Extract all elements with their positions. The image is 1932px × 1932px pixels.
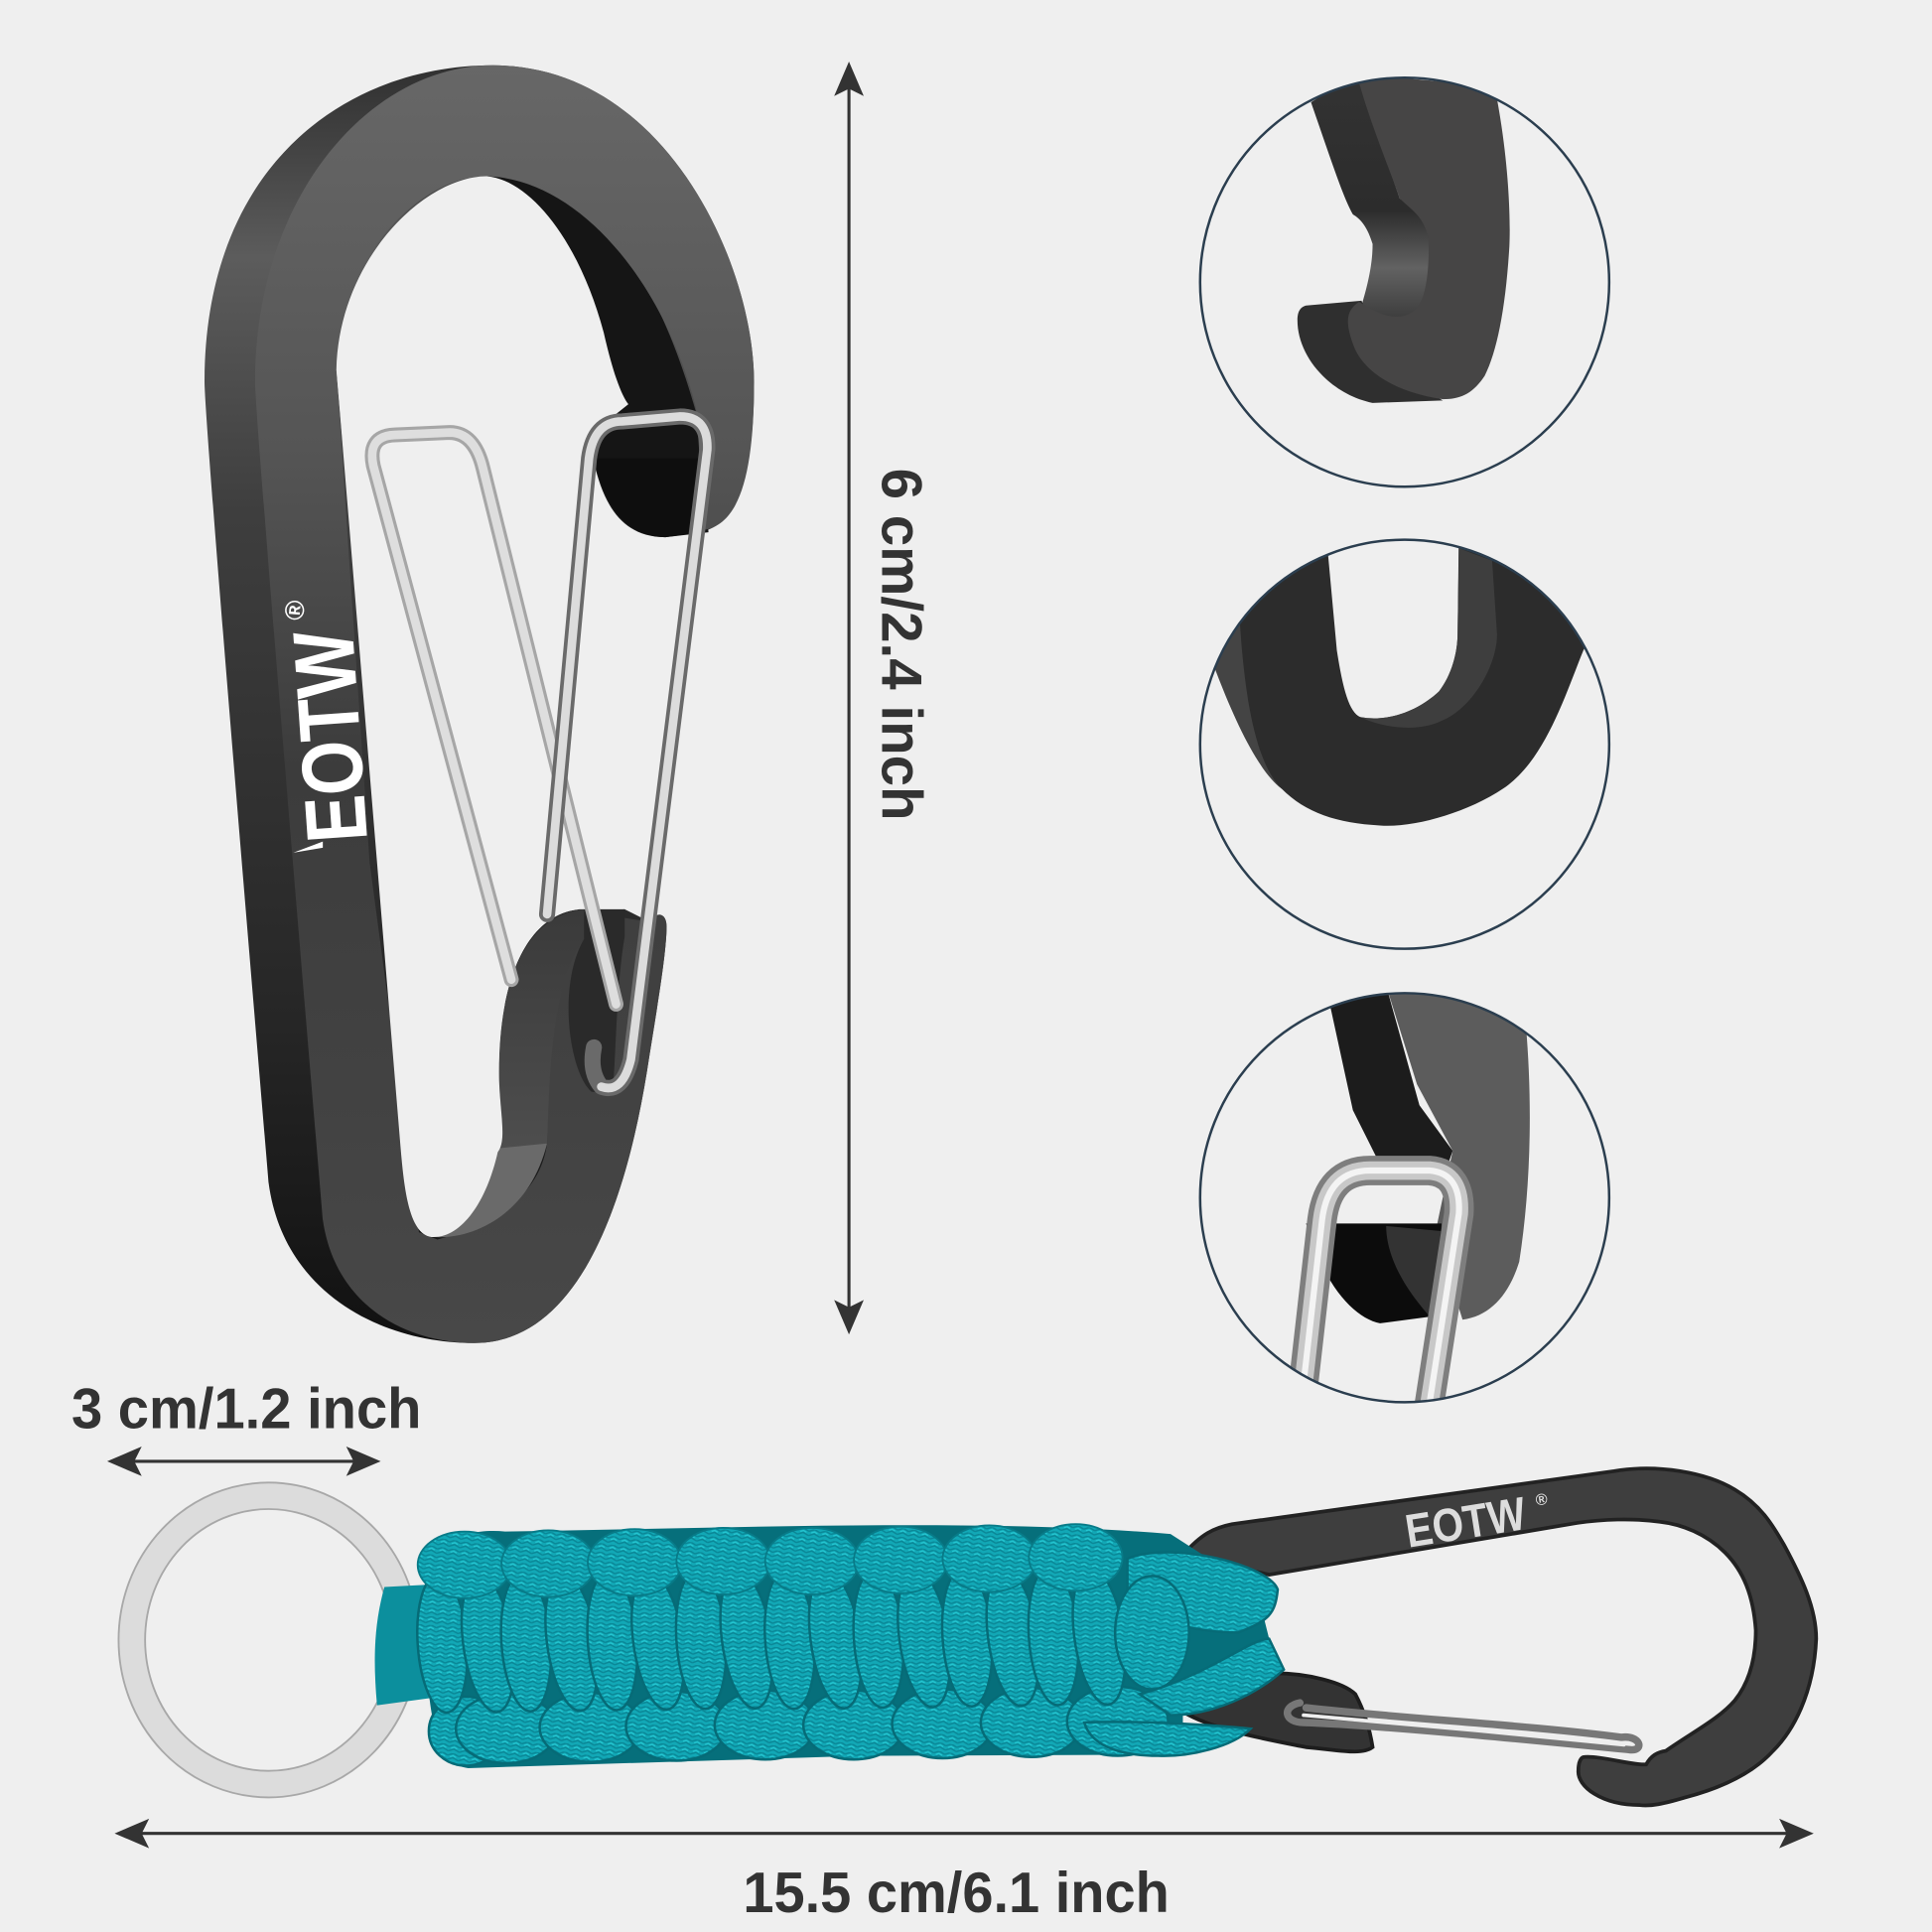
cord end strands [1084,1552,1284,1756]
arrow: height [834,62,864,1334]
knot weave [413,1524,1169,1763]
slot behind tail [569,909,624,1094]
rear ghost wire [372,433,617,1004]
cord body [425,1525,1269,1768]
label: height: 6 cm/2.4 inch [870,469,933,821]
carabiner side band [205,66,755,1343]
paracord strap [375,1524,1284,1768]
key ring [132,1496,405,1784]
strap tab [375,1585,431,1706]
small carabiner anchor [1189,1673,1373,1751]
label: ring width: 3 cm/1.2 inch [71,1377,421,1441]
carabiner inner dark underside [486,176,709,537]
small carabiner [1182,1468,1816,1805]
small carabiner wire [1288,1703,1639,1750]
left end bump [429,1697,502,1765]
logo on carabiner: EOTW [275,627,386,846]
detail circle: hook tip [1200,73,1609,486]
large carabiner [205,66,755,1343]
arrow: total length [114,1819,1814,1849]
logo on carabiner: ® [278,599,311,621]
tail lobe [497,909,584,1152]
label: total length: 15.5 cm/6.1 inch [743,1862,1170,1925]
front wire gate [547,416,707,1088]
small logo: EOTW [1402,1486,1530,1558]
small logo: ® [1534,1490,1549,1510]
nose underside [594,459,707,537]
detail circle: gate latch [1200,986,1609,1405]
arrow: ring width [107,1447,380,1476]
small carabiner body [1182,1468,1816,1805]
carabiner front face [255,66,755,1343]
central opening [337,176,628,1237]
detail circle: bottom curve [1200,530,1609,949]
inner bevel [434,1144,547,1237]
